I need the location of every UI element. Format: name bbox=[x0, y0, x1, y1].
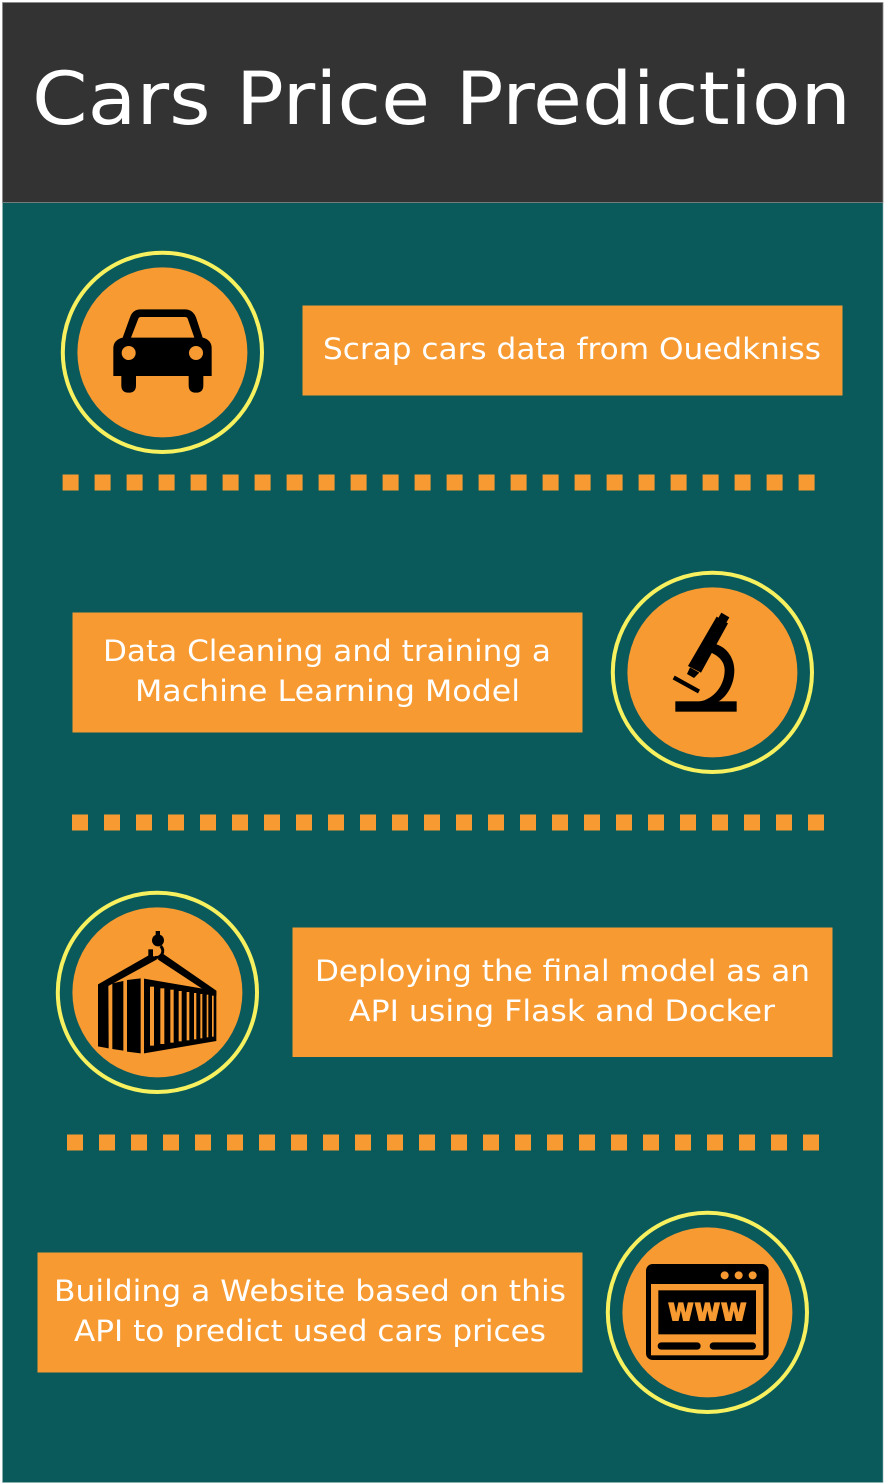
label box: step 3: Deploying the final model as an bbox=[315, 954, 810, 988]
label box: step 1 bbox=[302, 306, 842, 396]
icon: web browser in circle: www bbox=[668, 1291, 747, 1329]
dotted divider 3 bbox=[67, 1134, 819, 1150]
icon: web browser in circle bbox=[608, 1213, 807, 1412]
label box: step 2 bbox=[72, 612, 582, 732]
icon: shipping container in circle bbox=[58, 893, 257, 1092]
step 1: scrape data bbox=[63, 253, 843, 452]
label box: step 2: Machine Learning Model bbox=[135, 674, 520, 708]
dotted divider 1 bbox=[63, 474, 815, 490]
dotted divider 2 bbox=[72, 814, 824, 830]
label box: step 2: Data Cleaning and training a bbox=[103, 634, 551, 668]
label box: step 3: API using Flask and Docker bbox=[349, 994, 776, 1028]
panel: title header bbox=[2, 2, 883, 202]
step 3: deployment bbox=[58, 893, 833, 1092]
icon: microscope in circle bbox=[613, 573, 812, 772]
label box: step 3 bbox=[292, 928, 832, 1057]
step 2: cleaning and training bbox=[72, 573, 812, 772]
label box: step 4 bbox=[38, 1252, 582, 1372]
icon: car in circle bbox=[63, 253, 262, 452]
label box: step 1: Scrap cars data from Ouedkniss bbox=[323, 332, 821, 366]
title: Cars Price Prediction bbox=[32, 57, 851, 142]
label box: step 4: Building a Website based on this bbox=[54, 1274, 566, 1308]
label box: step 4: API to predict used cars prices bbox=[74, 1314, 546, 1348]
step 4: website bbox=[38, 1213, 807, 1412]
